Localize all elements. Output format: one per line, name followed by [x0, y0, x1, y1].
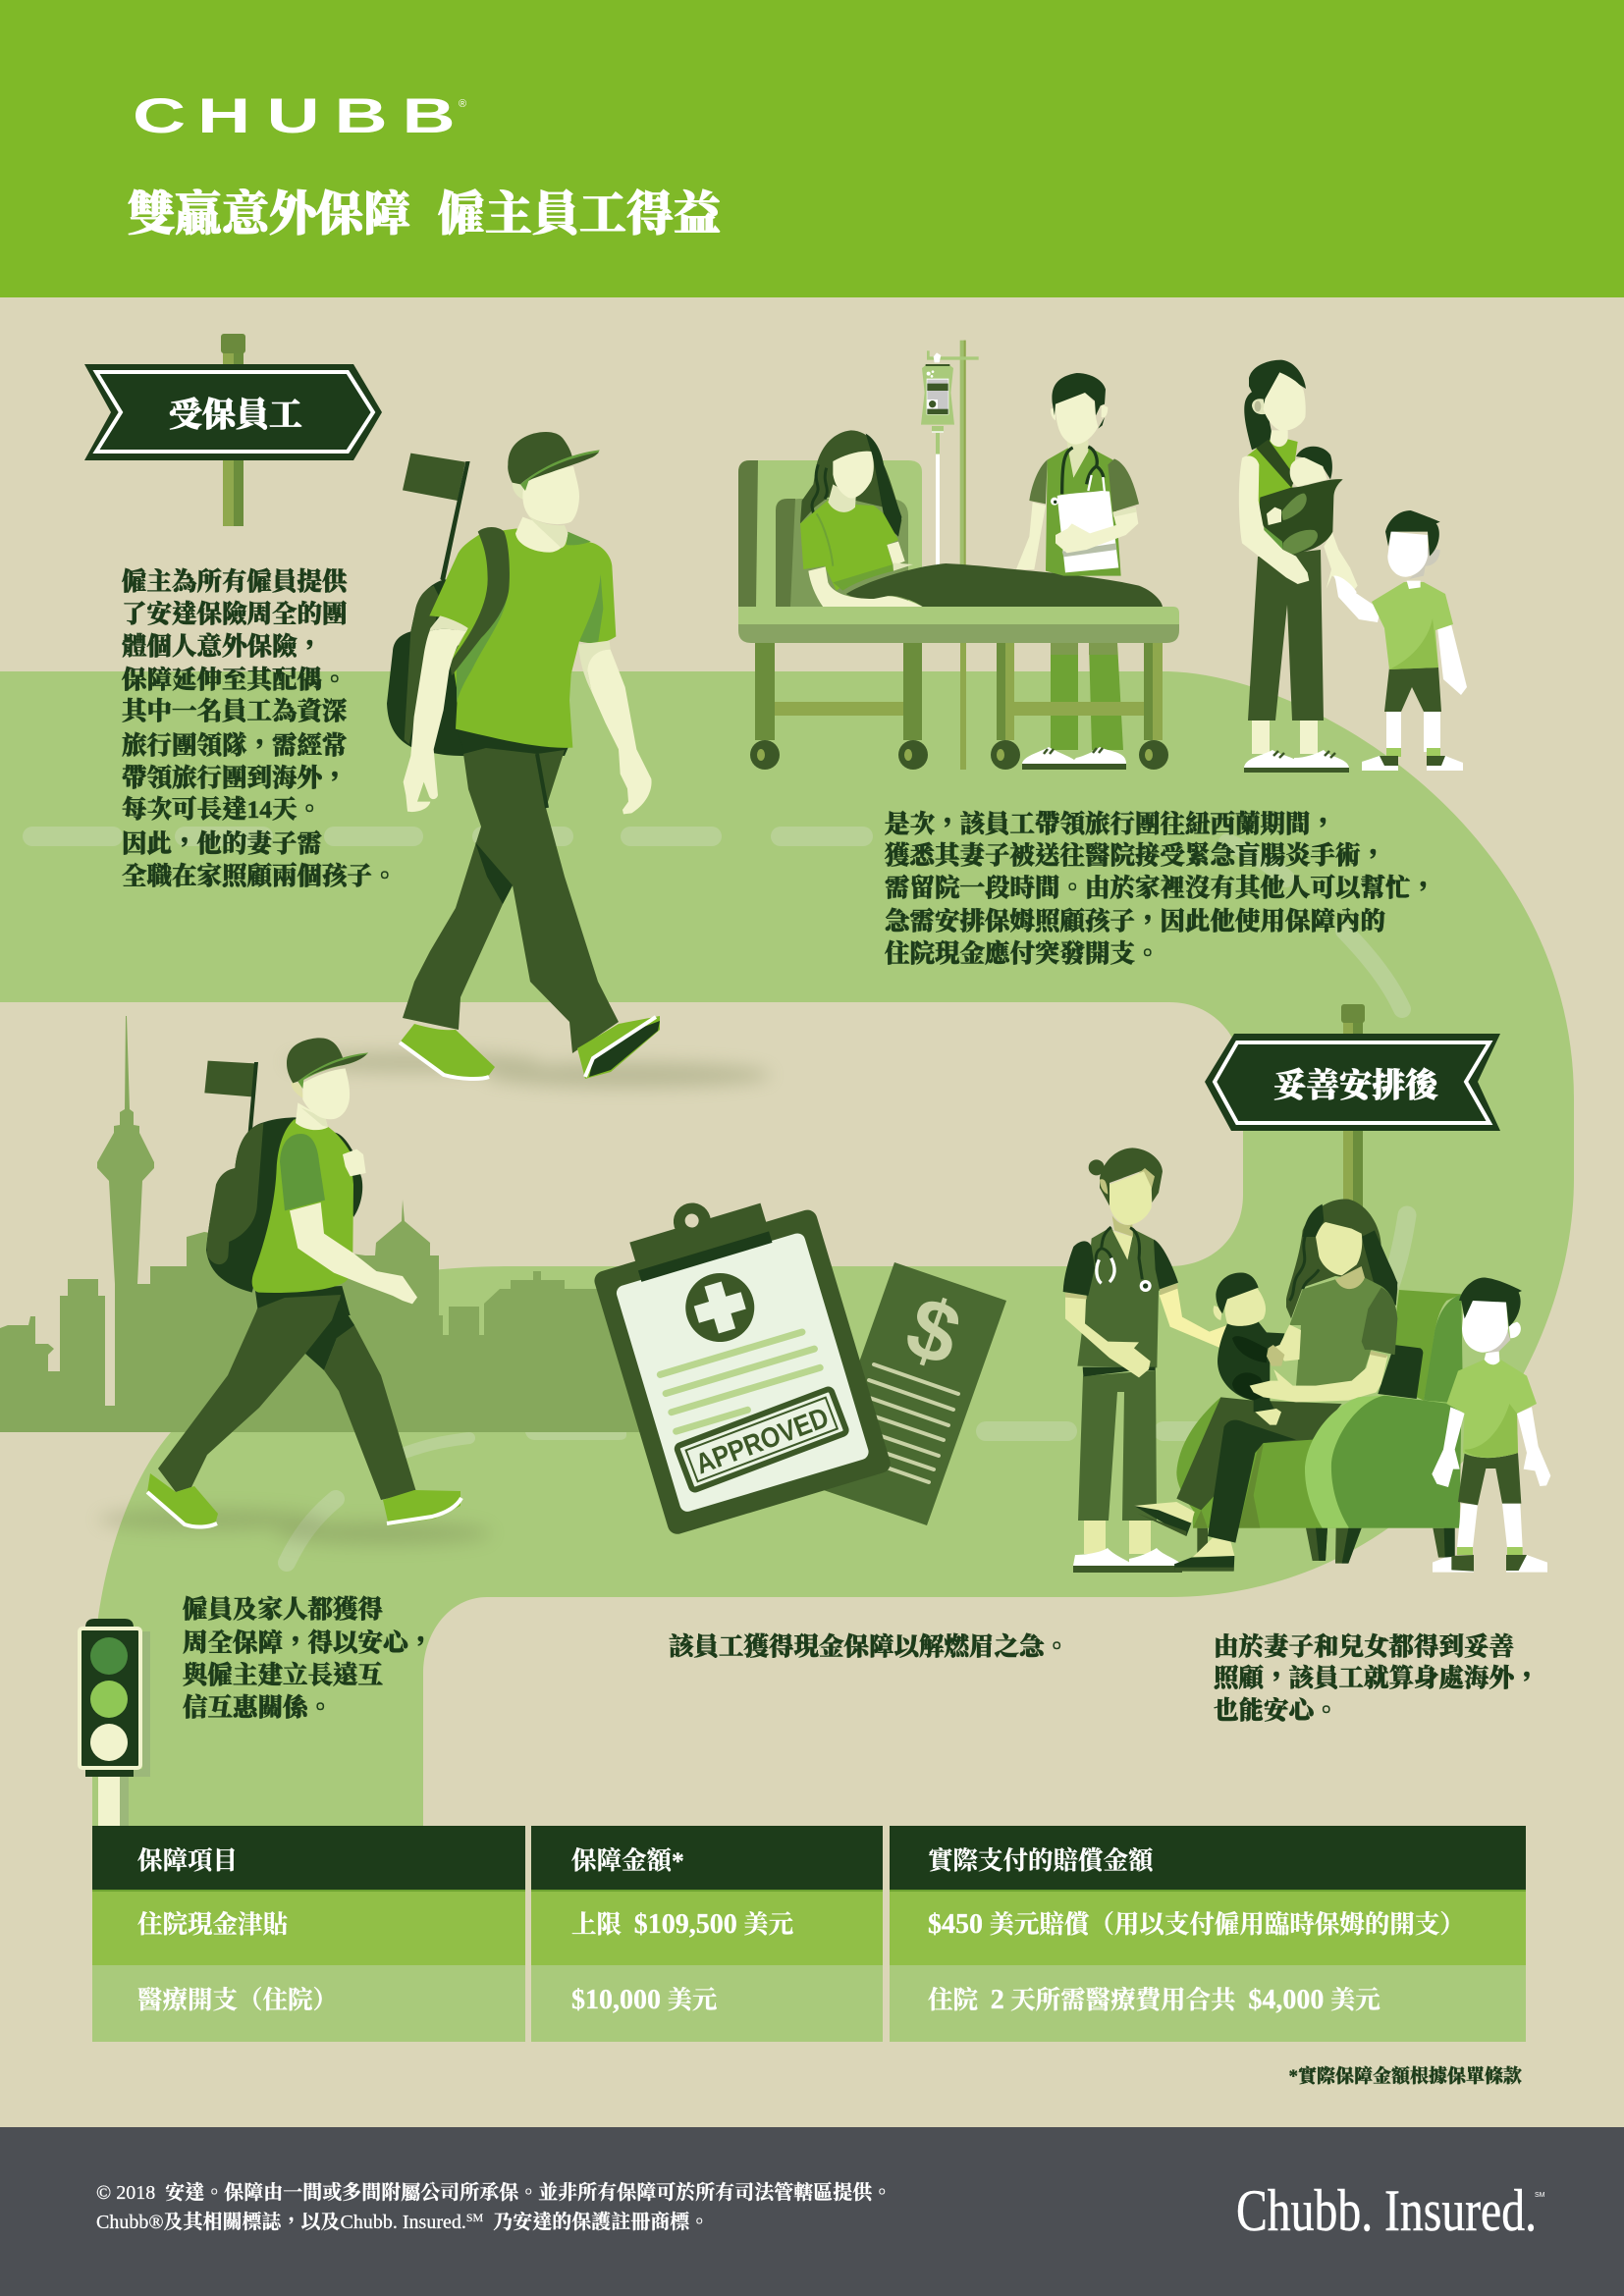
woman	[1134, 1199, 1397, 1572]
text: cash benefit: 該員工獲得現金保障以解燃眉之急。	[669, 1632, 1069, 1661]
text: employee and family protected	[183, 1595, 433, 1722]
legal text: 乃安達的保護註冊商標。	[483, 2211, 709, 2233]
text: incident description	[885, 810, 1435, 968]
benefits table: 實際支付的賠償金額	[928, 1846, 1155, 1875]
text: employee background: 體個人意外保險，	[122, 632, 322, 661]
benefits table: 住院 2 天所需醫療費用合共 $4,000 美元	[928, 1985, 1380, 2015]
text: employee and family protected: 周全保障，得以安心，	[183, 1629, 433, 1657]
text: incident description: 住院現金應付突發開支。	[885, 939, 1161, 968]
IV drip stand	[921, 341, 979, 566]
text: incident description: 獲悉其妻子被送往醫院接受緊急盲腸炎手術，	[885, 841, 1385, 870]
sofa, woman and boy	[1134, 1199, 1550, 1573]
benefits table: 醫療開支（住院）	[137, 1986, 338, 2014]
signpost: after arrangement	[1205, 1004, 1500, 1210]
footer band: SM	[1535, 2192, 1545, 2199]
traffic light	[80, 1619, 150, 1826]
boy	[1333, 510, 1467, 771]
text: incident description: 是次，該員工帶領旅行團往紐西蘭期間，	[885, 810, 1335, 838]
medical cross	[677, 1264, 763, 1351]
logo registered mark: ®	[459, 98, 466, 110]
text: employee background: 帶領旅行團到海外，	[121, 764, 348, 792]
patient and doctor	[800, 373, 1163, 607]
text: incident description: 需留院一段時間。由於家裡沒有其他人可以幫忙，	[885, 874, 1435, 902]
stamp: APPROVED	[691, 1402, 833, 1480]
text: employee background: 旅行團領隊，需經常	[122, 731, 348, 760]
text: peace of mind: 也能安心。	[1214, 1696, 1339, 1725]
text: employee background: 其中一名員工為資深	[122, 697, 348, 725]
benefits table: 上限 $109,500 美元	[571, 1909, 793, 1940]
nurse	[1063, 1148, 1227, 1573]
figure: walking traveller with backpack	[147, 1038, 461, 1527]
legal text: Chubb®及其相關標誌，以及Chubb. Insured.	[96, 2212, 466, 2233]
illustration: family on sofa with nurse	[1063, 1148, 1550, 1573]
header band	[0, 0, 1624, 297]
mother	[1239, 360, 1358, 773]
woman's arms	[1250, 1324, 1387, 1402]
benefits table: 保障項目	[137, 1846, 238, 1875]
logo: Chubb. Insured.: Chubb. Insured.	[1236, 2178, 1537, 2243]
boy standing	[1432, 1277, 1550, 1573]
signpost: insured employee	[84, 334, 382, 526]
invoice with dollar sign	[815, 1262, 1006, 1525]
bed frame	[738, 607, 1179, 624]
benefits table: $10,000 美元	[571, 1985, 717, 2015]
invoice with dollar sign: $	[895, 1277, 972, 1384]
signpost: insured employee: 受保員工	[169, 397, 302, 434]
child on lap	[1214, 1272, 1284, 1425]
logo: CHUBB: CHUBB	[133, 88, 456, 143]
figure: large walking man	[387, 432, 660, 1080]
backpack and flag	[387, 454, 569, 756]
pole lower section	[960, 565, 966, 770]
benefits table	[92, 1826, 1526, 2042]
text: peace of mind: 由於妻子和兒女都得到妥善	[1214, 1632, 1514, 1661]
text: employee background: 每次可長達14天。	[122, 795, 322, 824]
illustration: hospital bed and patient	[738, 341, 1179, 770]
benefits table: $450 美元賠償（用以支付僱用臨時保姆的開支）	[928, 1909, 1465, 1940]
clipboard with approved stamp	[580, 1169, 893, 1536]
legal text: © 2018 安達。保障由一間或多間附屬公司所承保。並非所有保障可於所有司法管轄區提供。	[96, 2180, 892, 2204]
torso and head	[404, 432, 652, 814]
footer band	[0, 2127, 1624, 2296]
text: employee background: 了安達保險周全的團	[122, 600, 348, 628]
trousers and shoes	[403, 748, 619, 1053]
benefits table: 住院現金津貼	[137, 1910, 288, 1939]
text: employee background: 全職在家照顧兩個孩子。	[122, 862, 398, 890]
sofa armrest	[1305, 1396, 1460, 1528]
title: 僱主員工得益	[438, 188, 722, 240]
road	[0, 671, 1574, 1826]
legal text: SM	[466, 2211, 484, 2224]
doctor upper body	[1016, 373, 1139, 576]
title: 雙贏意外保障	[128, 187, 410, 240]
text: employee and family protected: 信互惠關係。	[183, 1693, 333, 1722]
text: employee background: 保障延伸至其配偶。	[122, 666, 348, 694]
road dashes	[23, 827, 1407, 1563]
sofa	[1176, 1290, 1463, 1564]
text: peace of mind	[1214, 1632, 1540, 1725]
signpost: after arrangement: 妥善安排後	[1273, 1067, 1440, 1104]
text: employee and family protected: 與僱主建立長遠互	[183, 1661, 384, 1689]
text: employee background	[121, 567, 398, 890]
footnote: *實際保障金額根據保單條款	[1288, 2064, 1522, 2087]
ground shadows	[98, 1052, 771, 1545]
text: peace of mind: 照顧，該員工就算身處海外，	[1214, 1664, 1540, 1692]
text: employee and family protected: 僱員及家人都獲得	[183, 1595, 384, 1624]
text: employee background: 僱主為所有僱員提供	[122, 567, 350, 596]
doctor legs	[1022, 643, 1126, 770]
benefits table: 保障金額*	[571, 1846, 684, 1875]
text: employee background: 因此，他的妻子需	[122, 829, 322, 858]
text: incident description: 急需安排保姆照顧孩子，因此他使用保障內的	[885, 907, 1385, 935]
legal text	[96, 2180, 892, 2233]
illustration: mother with baby and boy	[1239, 360, 1467, 773]
title	[128, 187, 722, 240]
skyline	[0, 1016, 648, 1432]
